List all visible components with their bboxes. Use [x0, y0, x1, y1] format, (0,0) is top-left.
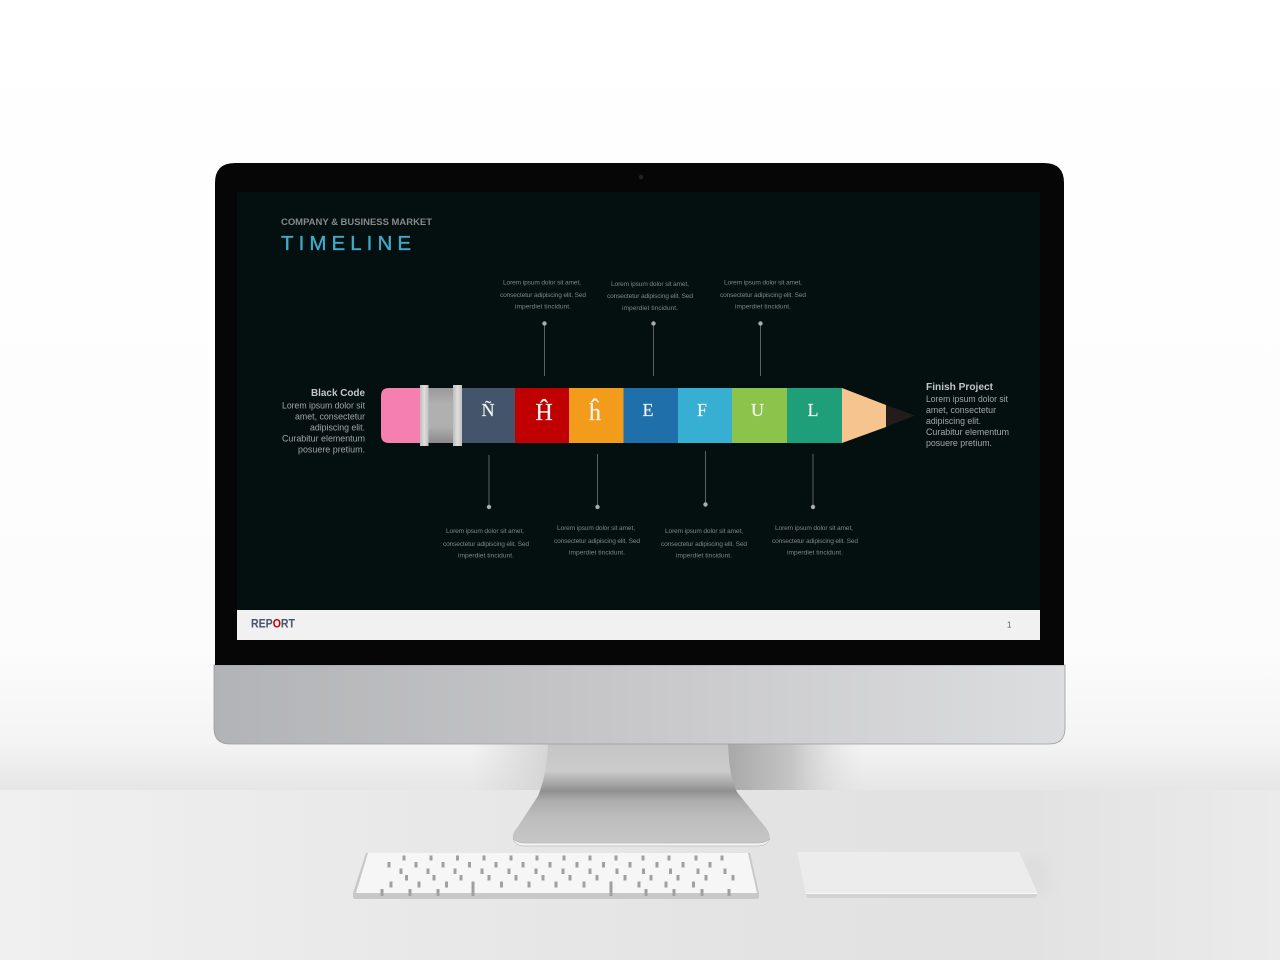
- right label: Finish Project: posuere pretium.: [926, 437, 992, 448]
- monitor black bezel: [215, 163, 1064, 665]
- segment L: L: [808, 400, 818, 420]
- monitor stand: [513, 744, 770, 846]
- bottom text blocks: imperdiet tincidunt.: [569, 550, 625, 556]
- page number: 1: [1007, 620, 1012, 630]
- segment H circumflex: [515, 388, 569, 443]
- monitor aluminium chin: [214, 665, 1065, 744]
- left label: Black Code: adipiscing elit.: [310, 422, 365, 432]
- bottom text blocks: imperdiet tincidunt.: [787, 550, 843, 556]
- keyboard: [353, 853, 759, 899]
- slide footer bar: [237, 610, 1040, 640]
- metal ferrule: [420, 385, 462, 446]
- segment E: [624, 388, 678, 443]
- bottom text blocks: Lorem ipsum dolor sit amet,: [446, 528, 524, 535]
- segment h circumflex: ĥ: [589, 399, 601, 426]
- bottom text blocks: consectetur adipiscing elit. Sed: [772, 538, 858, 545]
- bottom text blocks: consectetur adipiscing elit. Sed: [443, 541, 529, 548]
- segment N: [462, 388, 515, 443]
- left label: Black Code: amet, consectetur: [295, 410, 365, 422]
- left label: Black Code: [282, 387, 365, 454]
- top connector lines with dots: [542, 321, 763, 376]
- slide background: [237, 192, 1040, 610]
- right label: Finish Project: adipiscing elit.: [926, 415, 981, 426]
- pencil graphite: [886, 405, 915, 427]
- right label: Finish Project: [926, 381, 1009, 448]
- bottom text blocks: Lorem ipsum dolor sit amet,: [665, 528, 743, 535]
- top text blocks: consectetur adipiscing elit. Sed: [500, 292, 586, 299]
- left label: Black Code: Black Code: [311, 387, 365, 399]
- right label: Finish Project: amet, consectetur: [926, 404, 996, 415]
- pencil wood tip: [842, 388, 886, 443]
- pencil timeline: [381, 385, 915, 446]
- left label: Black Code: posuere pretium.: [298, 444, 365, 454]
- trackpad: [797, 852, 1052, 898]
- top text blocks: Lorem ipsum dolor sit amet,: [724, 280, 802, 286]
- top text blocks: consectetur adipiscing elit. Sed: [607, 293, 693, 300]
- segment H circumflex: Ĥ: [535, 400, 553, 426]
- bottom text blocks: imperdiet tincidunt.: [458, 552, 514, 560]
- segment F: [678, 388, 732, 443]
- eraser: [381, 388, 421, 443]
- top text blocks: imperdiet tincidunt.: [515, 304, 571, 310]
- webcam: [639, 175, 643, 179]
- top text blocks: Lorem ipsum dolor sit amet,: [503, 280, 581, 286]
- bottom text blocks: Lorem ipsum dolor sit amet,: [557, 525, 635, 532]
- bottom text blocks: consectetur adipiscing elit. Sed: [661, 541, 747, 548]
- bottom connector lines with dots: [487, 451, 815, 509]
- top text blocks: [500, 280, 806, 312]
- bottom text blocks: consectetur adipiscing elit. Sed: [554, 538, 640, 545]
- segment F: F: [697, 400, 707, 420]
- top text blocks: Lorem ipsum dolor sit amet,: [611, 281, 689, 288]
- top text blocks: imperdiet tincidunt.: [735, 304, 791, 310]
- bottom text blocks: [443, 525, 858, 560]
- title: TIMELINE: [281, 232, 411, 255]
- bottom text blocks: imperdiet tincidunt.: [676, 552, 732, 560]
- segment N: Ñ: [482, 399, 494, 420]
- right label: Finish Project: Finish Project: [926, 381, 993, 393]
- subtitle: COMPANY & BUSINESS MARKET: [281, 217, 432, 228]
- slide heading: [281, 217, 432, 255]
- segment E: E: [642, 400, 654, 420]
- left label: Black Code: Lorem ipsum dolor sit: [282, 400, 365, 410]
- segment L: [787, 388, 842, 443]
- top text blocks: imperdiet tincidunt.: [622, 305, 678, 312]
- bottom text blocks: Lorem ipsum dolor sit amet,: [775, 525, 853, 532]
- segment h circumflex: [569, 388, 624, 443]
- top text blocks: consectetur adipiscing elit. Sed: [720, 292, 806, 299]
- left label: Black Code: Curabitur elementum: [282, 432, 365, 444]
- right label: Finish Project: Lorem ipsum dolor sit: [926, 393, 1008, 404]
- report logo: REPORT: [251, 618, 295, 630]
- segment U: U: [751, 400, 764, 420]
- segment U: [732, 388, 787, 443]
- right label: Finish Project: Curabitur elementum: [926, 426, 1009, 437]
